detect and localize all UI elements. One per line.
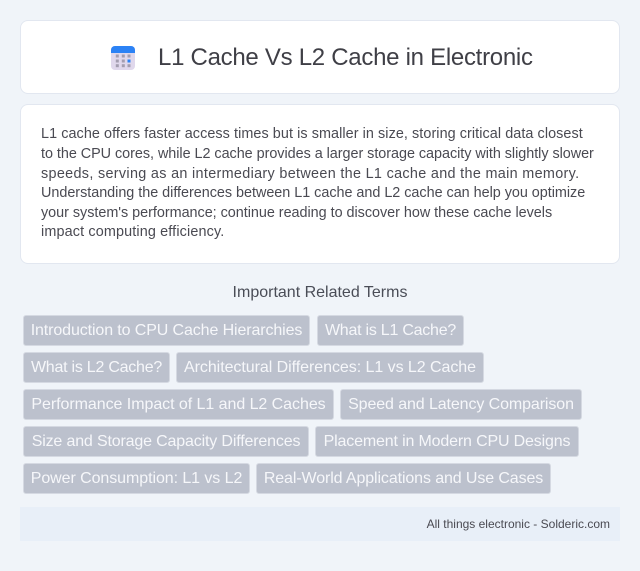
chip: what is L2: What is L2 Cache?	[31, 359, 162, 376]
chip: real-world applications	[256, 463, 551, 494]
chip: architectural differences: Architectural Differences: L1 vs L2 Cache	[184, 359, 476, 376]
chip: power consumption	[23, 463, 250, 494]
related terms heading: Important Related Terms	[233, 284, 407, 301]
chip: speed and latency	[340, 389, 582, 420]
chip: architectural differences	[176, 352, 484, 383]
chip: introduction	[23, 315, 310, 346]
chip: performance impact	[23, 389, 334, 420]
chip: placement	[315, 426, 579, 457]
description text: your system's performance; continue reading to discover how these cache levels	[41, 205, 552, 221]
description text: impact computing efficiency.	[41, 224, 224, 240]
chip: real-world applications: Real-World Applications and Use Cases	[264, 470, 543, 487]
icon: calendar grid	[111, 46, 135, 70]
description card	[20, 104, 620, 264]
header card	[20, 20, 620, 94]
description text: to the CPU cores, while L2 cache provides a larger storage capacity with slightly slower	[41, 146, 594, 162]
chip: placement: Placement in Modern CPU Designs	[324, 433, 570, 450]
chip: size and storage: Size and Storage Capacity Differences	[32, 433, 300, 450]
chip: speed and latency: Speed and Latency Comparison	[348, 396, 574, 413]
chip: what is L2	[23, 352, 170, 383]
description text: speeds, serving as an intermediary between the L1 cache and the main memory.	[41, 166, 579, 182]
footer credit: All things electronic - Solderic.com	[427, 517, 610, 531]
chip: power consumption: Power Consumption: L1 vs L2	[31, 470, 242, 487]
chip: performance impact: Performance Impact of L1 and L2 Caches	[31, 396, 326, 413]
description text	[41, 126, 594, 240]
chip: size and storage	[23, 426, 309, 457]
description text: L1 cache offers faster access times but is smaller in size, storing critical data closest	[41, 126, 583, 142]
chip: what is L1: What is L1 Cache?	[325, 322, 456, 339]
footer	[20, 507, 620, 541]
title: L1 Cache Vs L2 Cache in Electronic	[158, 44, 533, 71]
description text: Understanding the differences between L1 cache and L2 cache can help you optimize	[41, 185, 585, 201]
chip: introduction: Introduction to CPU Cache Hierarchies	[31, 322, 302, 339]
chip: what is L1	[317, 315, 464, 346]
